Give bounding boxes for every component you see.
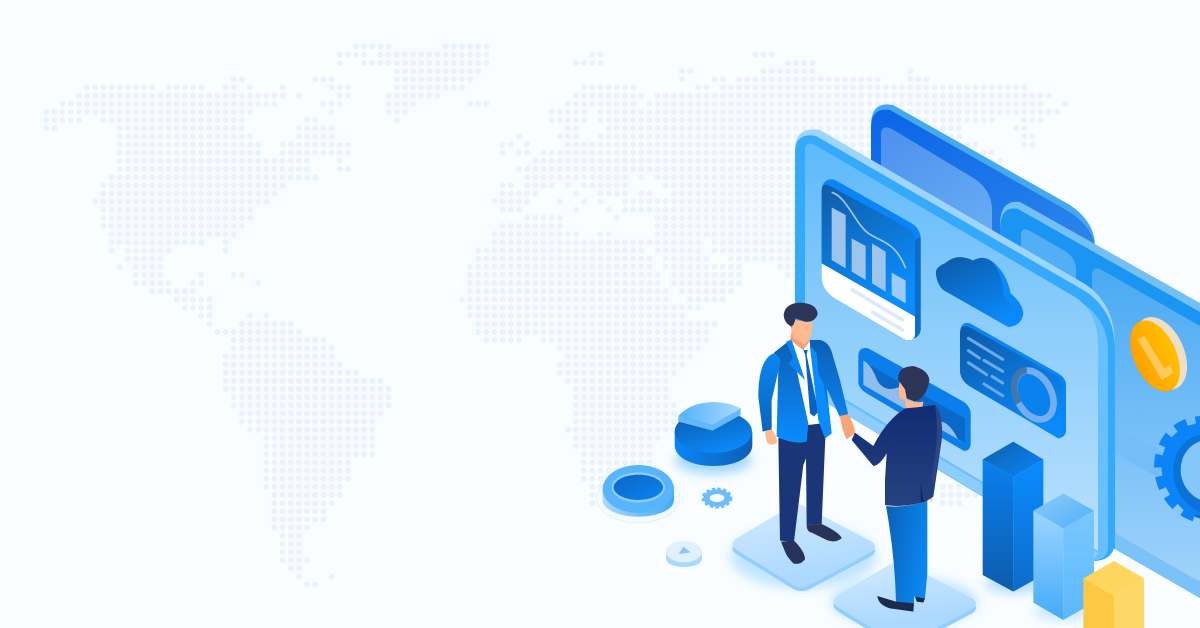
coin letter L: [1138, 336, 1174, 380]
bars: [832, 207, 906, 303]
tie: [803, 350, 818, 417]
cloud icon: [936, 257, 1023, 327]
platform under second man: [831, 561, 978, 628]
handshake hands: [840, 414, 855, 439]
neck and ear: [899, 380, 923, 411]
left hand: [765, 429, 777, 445]
pie chart object: [675, 402, 752, 474]
text lines: [968, 338, 1003, 396]
neck: [790, 332, 811, 349]
donut info card: [960, 323, 1066, 438]
caption lines: [852, 290, 903, 330]
trousers: [886, 501, 927, 604]
shoes: [781, 541, 805, 564]
jacket right side: [810, 340, 848, 438]
dotted world map: [46, 47, 1065, 585]
wave: [863, 361, 965, 443]
donut: [1006, 363, 1062, 426]
hair: [898, 366, 929, 402]
trousers: [778, 422, 826, 542]
raised slice: [678, 408, 741, 431]
left sleeve: [758, 353, 780, 432]
trend curve: [832, 192, 906, 268]
man in navy jacket: [840, 366, 942, 612]
small gear icon: [703, 489, 731, 507]
play button icon: [666, 541, 702, 567]
right dashboard panel: [1000, 202, 1200, 598]
platform under first man: [730, 504, 877, 591]
light blue 3D bar: [1033, 493, 1094, 620]
jacket body: [774, 340, 808, 443]
man in blue suit: [758, 303, 848, 564]
shirt: [790, 340, 822, 425]
yellow 3D bar: [1083, 561, 1144, 628]
ring object: [597, 465, 680, 523]
shoes: [877, 596, 914, 612]
front dashboard panel: [795, 129, 1115, 561]
face: [790, 320, 813, 344]
dark blue 3D bar: [983, 442, 1045, 593]
back dashboard panel: [871, 104, 1095, 330]
hand behind: [929, 487, 933, 503]
left lapel: [786, 340, 805, 380]
bar chart card: [822, 179, 921, 341]
wave chart card: [858, 348, 971, 451]
right lapel: [810, 345, 832, 438]
gold coin icon: [1120, 309, 1198, 399]
hair: [784, 303, 818, 327]
large gear icon: [1142, 405, 1200, 537]
jacket: [852, 405, 942, 506]
